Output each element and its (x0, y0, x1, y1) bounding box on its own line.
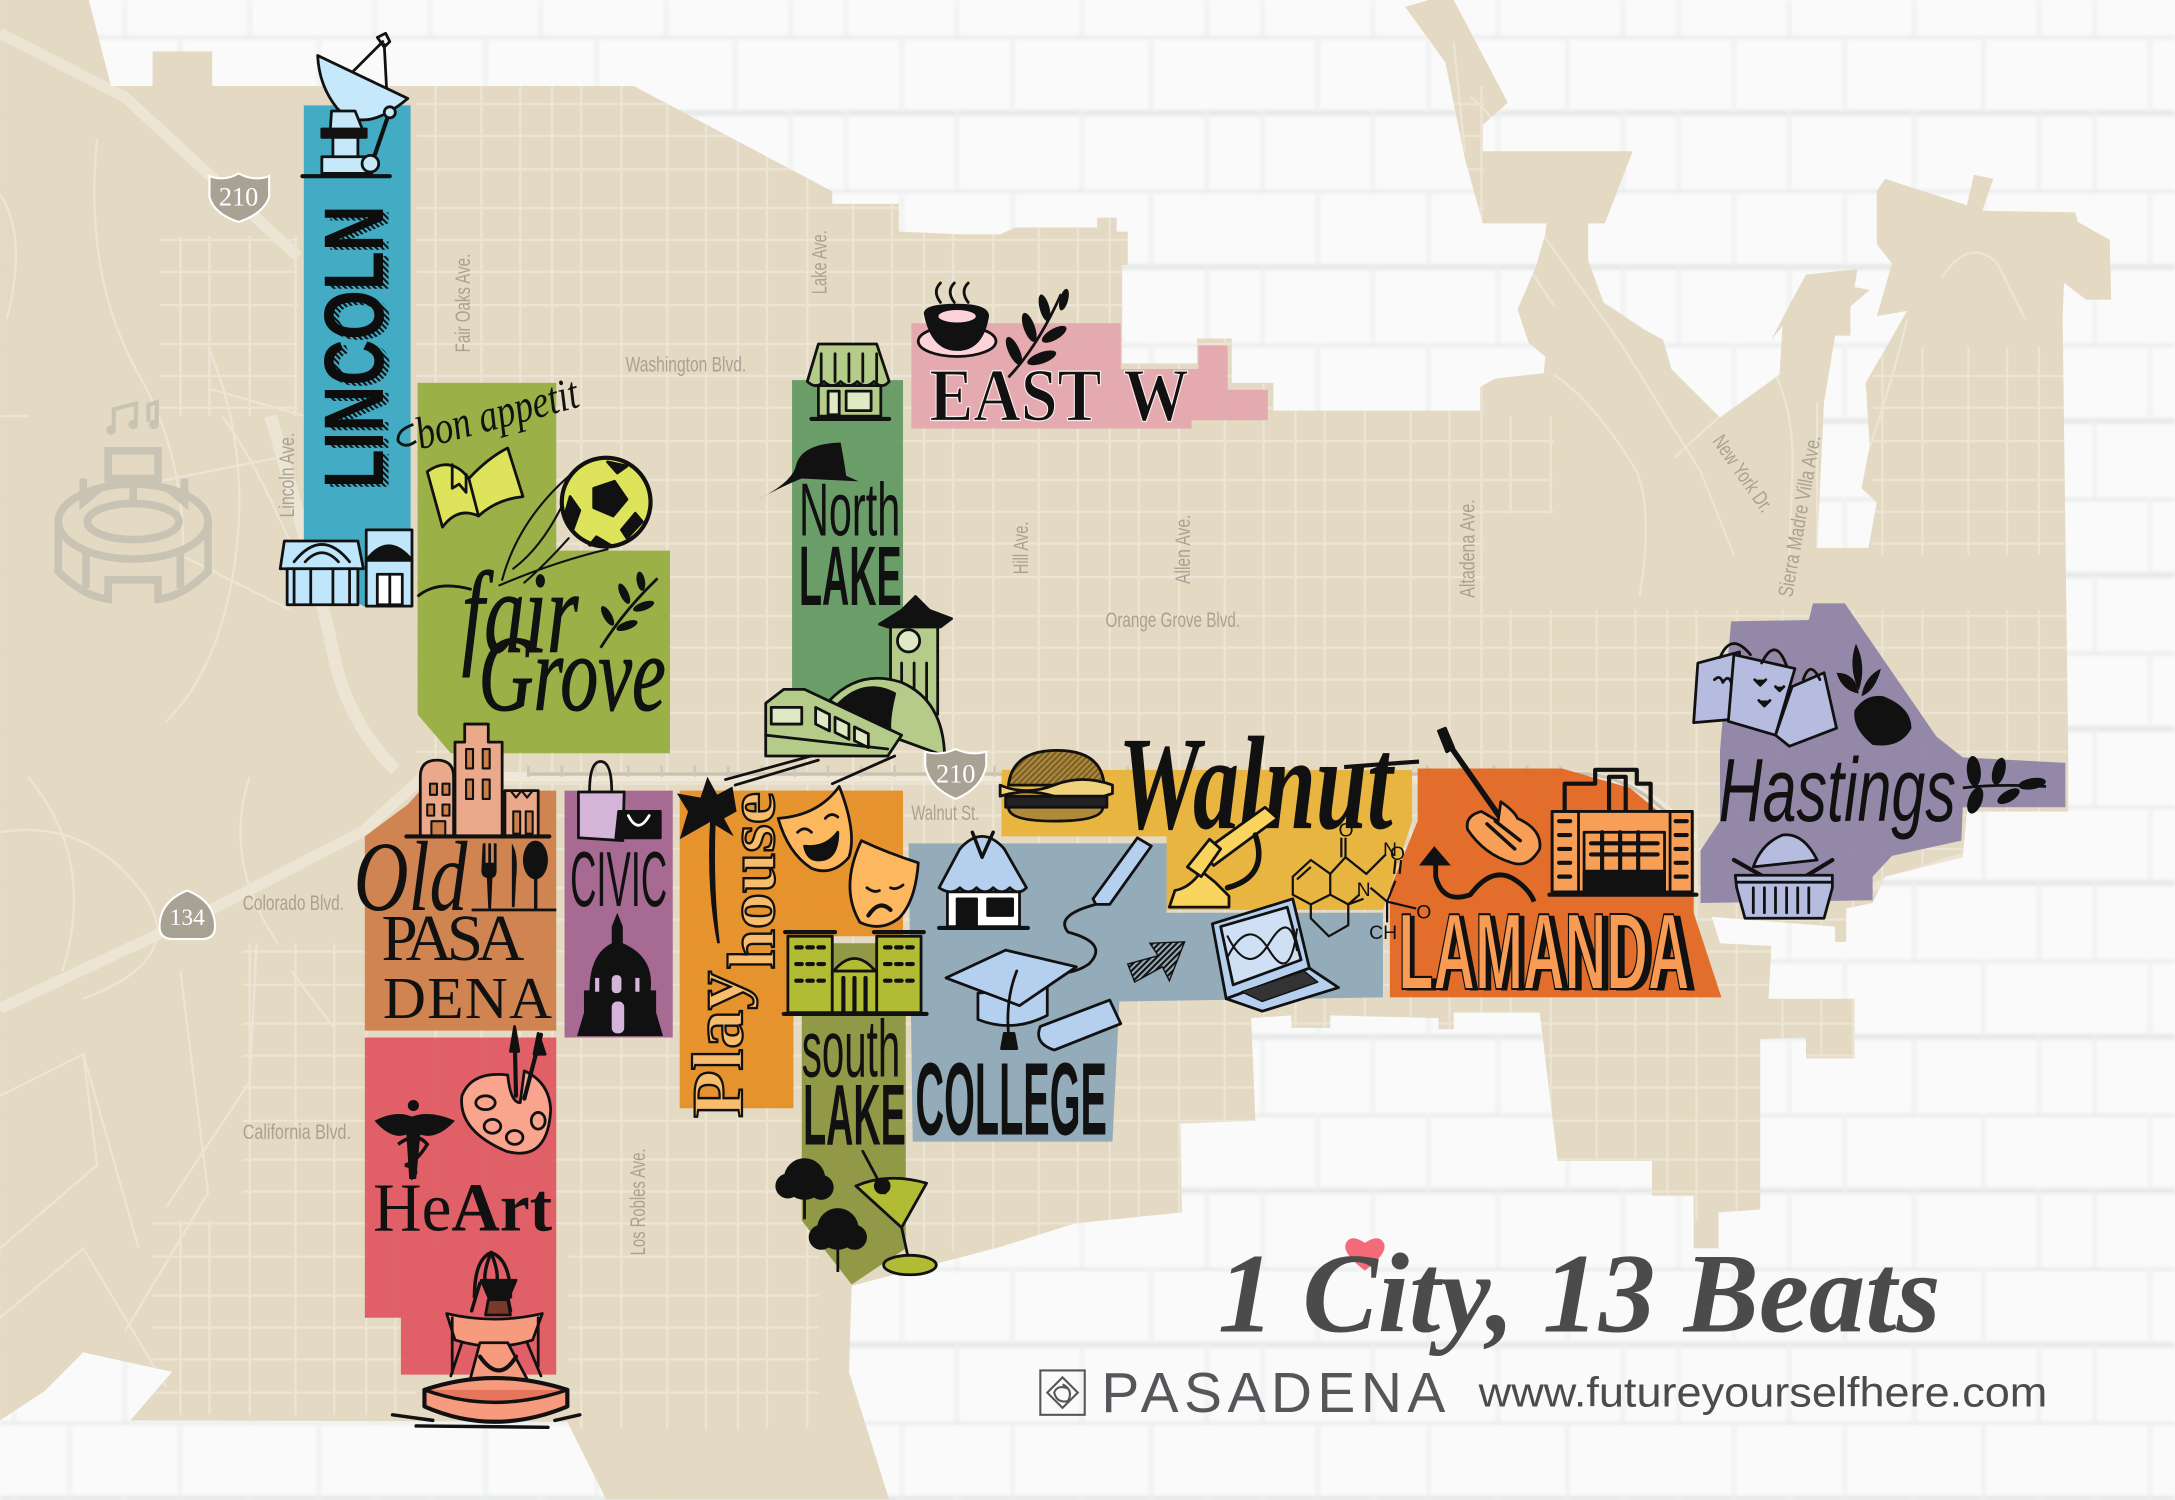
icon: burger (1000, 750, 1112, 821)
district: College: COLLEGE (916, 1042, 1107, 1157)
Lincoln title: LINCOLN (306, 205, 401, 488)
Lamanda title: LAMANDA (1398, 891, 1689, 1012)
icon: Ambassador building (784, 932, 927, 1014)
street labels: Colorado Blvd. (243, 892, 344, 915)
district: HeArt (365, 1026, 580, 1427)
North Lake title: North (799, 467, 900, 551)
icon: shop (807, 344, 889, 419)
street labels: Allen Ave. (1172, 515, 1195, 584)
text: bon appetit: bon appetit (410, 366, 585, 459)
Hastings title: Hastings (1719, 740, 1956, 841)
district: Civic (565, 762, 673, 1038)
tagline (1218, 1231, 1941, 1357)
street labels: California Blvd. (243, 1121, 351, 1144)
district: Fair Grove (398, 366, 670, 753)
arrow head (1419, 846, 1451, 866)
icon: city hall (577, 913, 663, 1036)
stadium icon: Rose Bowl (58, 402, 208, 599)
Playhouse title: house (716, 792, 789, 970)
street labels: Lake Ave. (809, 230, 832, 294)
street labels: Walnut St. (911, 802, 979, 825)
icon: rose square (1040, 1370, 1085, 1415)
Old Pasadena title: Old (354, 821, 468, 932)
street labels: New York Dr. (1708, 431, 1777, 517)
icon: curved arrow (1436, 863, 1534, 902)
North Lake title (799, 467, 902, 623)
street labels: Lincoln Ave. (276, 433, 299, 517)
icon: satellite dish (302, 33, 408, 176)
HeArt title: HeArt (373, 1169, 552, 1246)
icon: palette and brushes (462, 1026, 551, 1153)
highway shield 210 Walnut (925, 749, 986, 799)
tagline text: 1 City, 13 Beats (1218, 1231, 1941, 1357)
street labels: Hill Ave. (1010, 522, 1033, 574)
Lamanda title (1398, 891, 1696, 1013)
street labels: Sierra Madre Villa Ave. (1774, 434, 1825, 599)
icon: Pasadena convention building (1549, 770, 1696, 895)
district: North Lake: LAKE (799, 528, 902, 623)
icon: storefront (939, 832, 1028, 928)
icon: sprig (598, 571, 658, 648)
icon: arrow (1128, 942, 1185, 982)
South Lake title: south (802, 1004, 900, 1094)
icon: train and tunnel (725, 678, 945, 785)
icon: microscope (1169, 807, 1278, 907)
chemical labels: N (1383, 839, 1397, 861)
street labels: Fair Oaks Ave. (452, 254, 475, 352)
icon: heart (1345, 1238, 1385, 1271)
icon: highlighter and squiggle (1054, 838, 1151, 974)
Fair Grove title (418, 549, 666, 734)
district: South Lake (775, 932, 936, 1284)
highway shield 210 north: 210 (219, 182, 258, 211)
highway shield 210 Walnut: 210 (936, 759, 975, 788)
Fair Grove title: fair (462, 549, 579, 678)
Old Pasadena title: DENA (383, 965, 552, 1031)
highway shield 134 (160, 891, 215, 939)
district: Lamanda (1390, 728, 1721, 1013)
district: Playhouse (677, 777, 918, 1118)
icon: clock tower (879, 596, 952, 714)
street labels: Altadena Ave. (1456, 499, 1479, 598)
Playhouse title: Play (678, 971, 758, 1118)
icon: guitar (1438, 728, 1540, 864)
icon: caduceus (375, 1100, 455, 1179)
district: Old Pasadena (354, 724, 556, 1031)
East W title: W (1124, 354, 1189, 437)
website: www.futureyourselfhere.com (1478, 1369, 2047, 1416)
district: Hastings (1694, 603, 2065, 918)
icon: leaf sprig (1963, 755, 2047, 816)
district: South Lake: LAKE (803, 1067, 906, 1163)
Old Pasadena title: PASA (381, 903, 524, 975)
Pasadena wordmark: PASADENA (1101, 1362, 1445, 1425)
district: Walnut (1000, 709, 1419, 910)
chemical labels: O (1339, 819, 1354, 841)
chemical labels: O (1390, 843, 1405, 865)
district: College (909, 832, 1383, 1157)
Walnut title: Walnut (1118, 709, 1395, 857)
icon: historic buildings (406, 724, 549, 836)
highway shield 210 north (209, 173, 269, 222)
district: East Walnut (911, 283, 1268, 437)
Pasadena logo (1040, 1362, 1445, 1425)
district: Lincoln (280, 33, 412, 606)
icon: laptop (1212, 899, 1339, 1011)
district: North Lake (725, 344, 952, 785)
icon: fire helmet (759, 442, 859, 499)
highway shield 134: 134 (170, 905, 205, 931)
icon: shopping bags (578, 762, 660, 841)
icon: coffee cup (918, 283, 996, 356)
icon: graduation cap and diploma (946, 950, 1121, 1050)
street labels (243, 230, 1825, 1255)
icon: fountain (393, 1253, 580, 1427)
street labels: Washington Blvd. (626, 354, 746, 377)
icon: leaf cluster and rose (1837, 644, 1911, 746)
South Lake title (802, 1004, 906, 1163)
Lincoln title: LINCOLN (311, 208, 406, 491)
text: CIVIC (570, 837, 667, 923)
icon: chemical structure (1293, 819, 1431, 944)
chemical labels (1339, 819, 1431, 944)
street labels: Orange Grove Blvd. (1106, 609, 1240, 632)
icon: storefronts (280, 530, 412, 606)
icon: shopping bags (1694, 644, 1837, 746)
Playhouse title (678, 792, 789, 1118)
icon: theatre masks (778, 786, 918, 926)
icon: soccer ball (499, 458, 651, 585)
East W title: EAST (929, 354, 1101, 437)
icon: palm tree (677, 777, 737, 943)
chemical labels: O (1416, 901, 1431, 923)
street labels: Los Robles Ave. (627, 1149, 650, 1255)
highways (0, 33, 1967, 1008)
icon: leaf sprig (1003, 288, 1071, 377)
Lamanda title: LAMANDA (1402, 892, 1696, 1013)
icon: open book (427, 448, 523, 527)
East W title: EAST (929, 354, 1101, 437)
icon: fork, knife, spoon (472, 841, 556, 911)
icon: martini (856, 1151, 936, 1275)
chemical labels: CH (1369, 922, 1397, 944)
Fair Grove title: Grove (479, 615, 666, 734)
Old Pasadena title (354, 821, 552, 1031)
chemical labels: N (1357, 879, 1371, 901)
icon: trees (775, 1158, 867, 1272)
East W title: W (1124, 354, 1189, 437)
icon: grocery basket (1734, 835, 1832, 918)
